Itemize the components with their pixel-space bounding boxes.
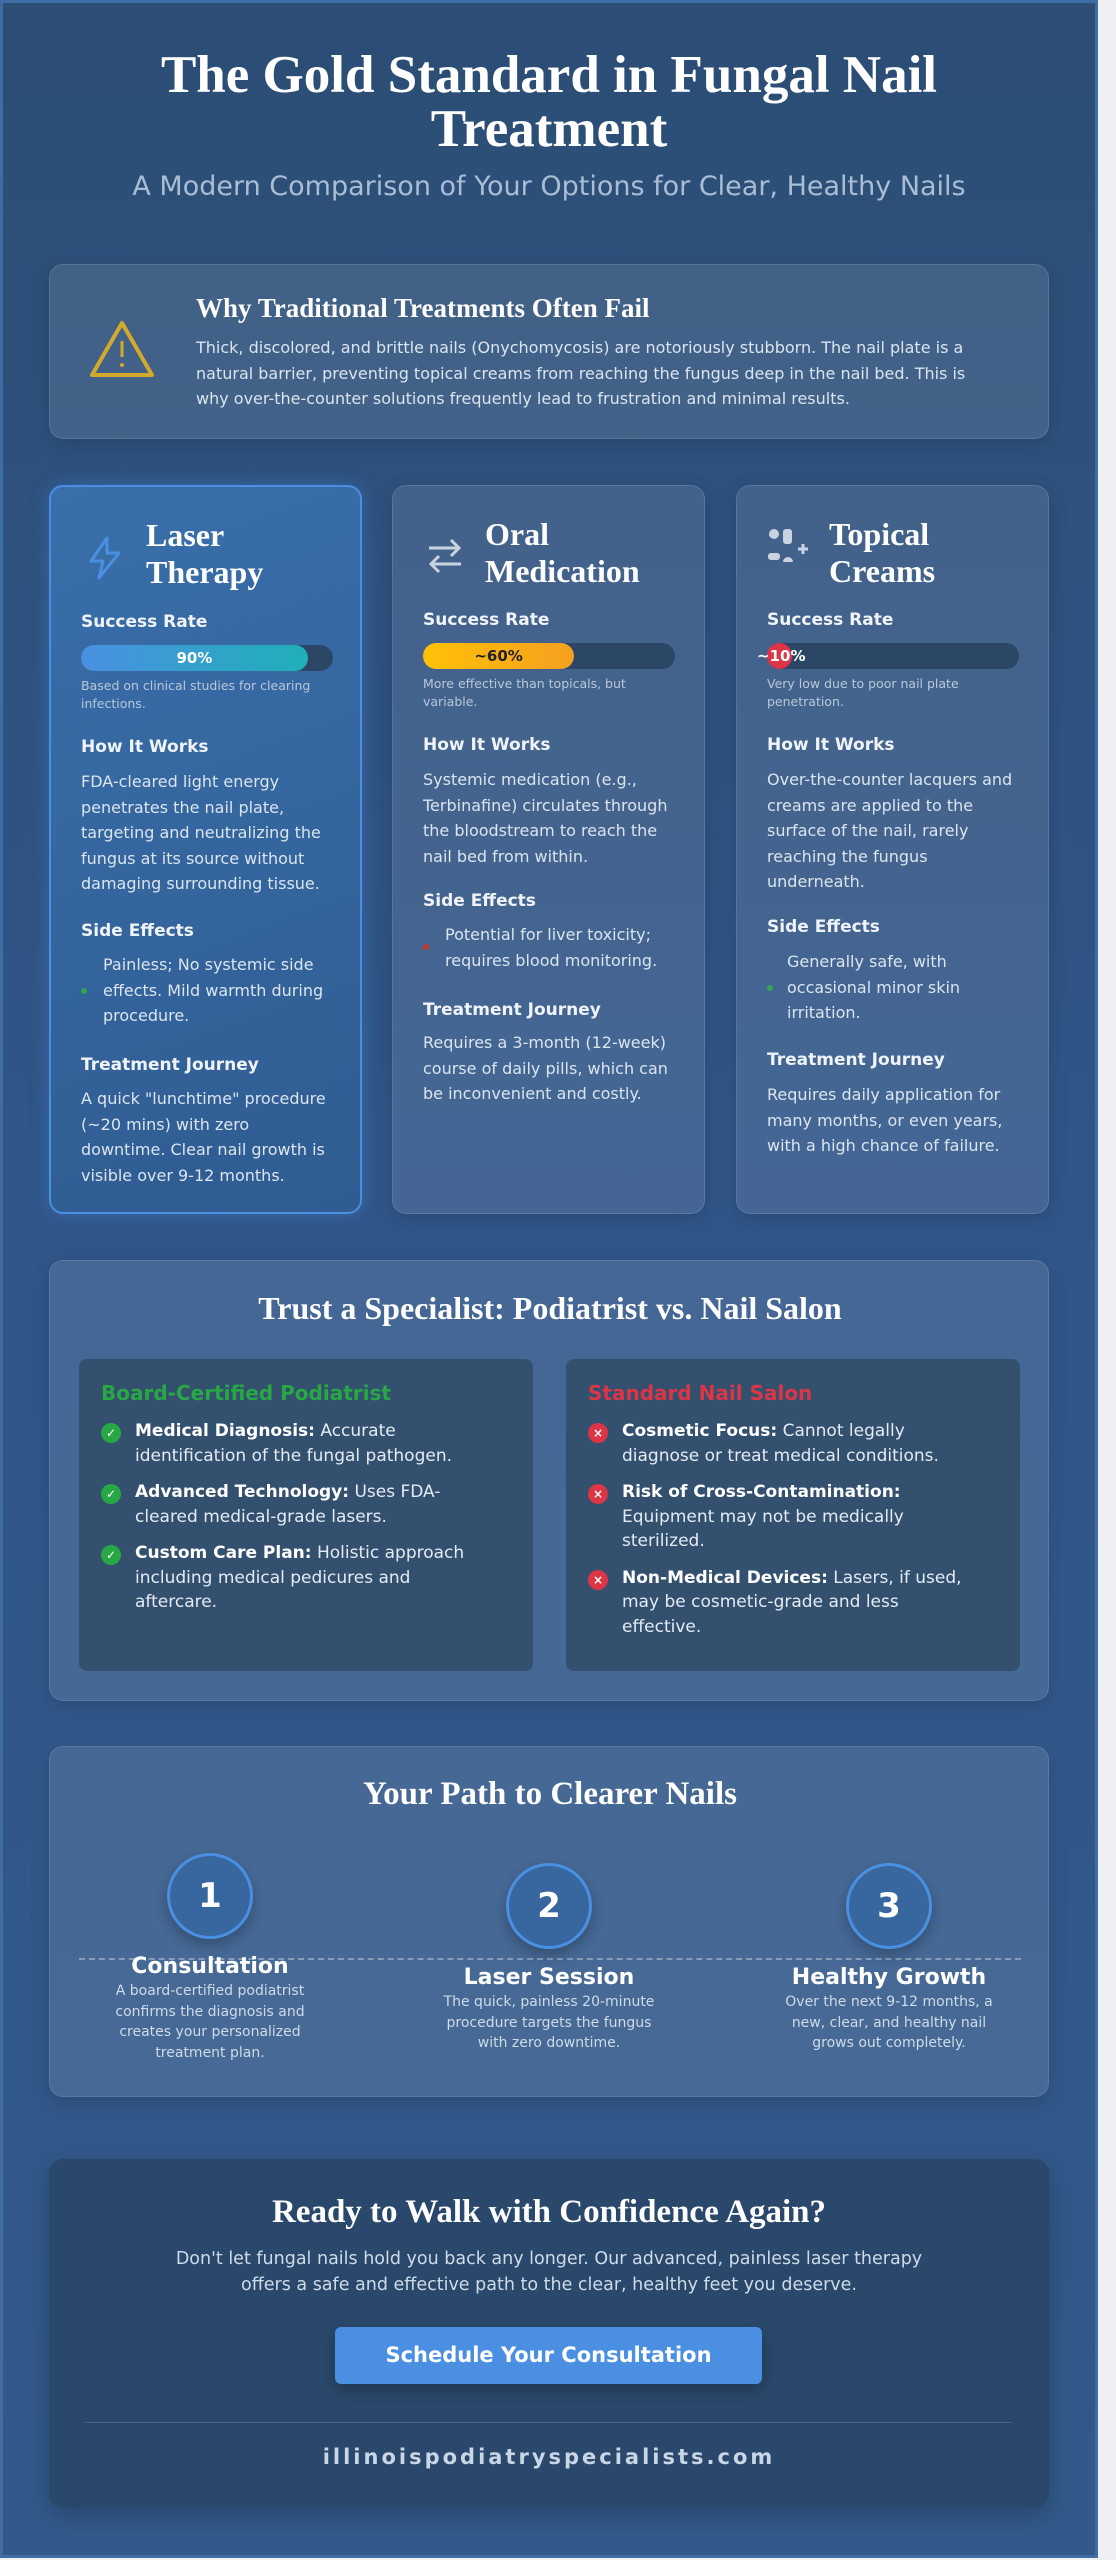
text: Don't let fungal nails hold you back any longer. Our advanced, painless laser therapy offers a safe and effective path to the clear, healthy feet you deserve. [176, 2249, 922, 2295]
step 2: 2 [537, 1886, 561, 1926]
panel: laser therapy: Based on clinical studies for clearing infections. [81, 678, 310, 711]
icon: lightning [90, 536, 120, 580]
panel: call to action [49, 2159, 1049, 2508]
column: salon: × [593, 1487, 603, 1501]
panel: laser therapy: A quick "lunchtime" procedure (~20 mins) with zero downtime. Clear nail growth is visible over 9-12 months. [81, 1089, 326, 1184]
panel: topical creams: How It Works [767, 735, 895, 755]
panel: topical creams: Very low due to poor nail plate penetration. [767, 676, 959, 709]
icon: exchange arrows [429, 539, 461, 573]
panel: oral medication: Side Effects [423, 891, 536, 911]
column: podiatrist: Custom Care Plan: Holistic approach including medical pedicures and aftercare. [135, 1543, 464, 1612]
step 1: Consultation [131, 1954, 289, 1979]
icon: warning triangle [90, 320, 154, 377]
heading: Your Path to Clearer Nails [363, 1776, 737, 1812]
icon: cream dots [768, 529, 808, 562]
panel: laser therapy: Side Effects [81, 921, 194, 941]
panel: topical creams: Treatment Journey [767, 1050, 945, 1070]
bar: ~10% [767, 643, 1019, 669]
column: salon: Cosmetic Focus: Cannot legally diagnose or treat medical conditions. [622, 1421, 939, 1466]
card title [146, 517, 264, 590]
column: podiatrist: Medical Diagnosis: Accurate identification of the fungal pathogen. [135, 1421, 452, 1466]
step 3 [785, 1863, 993, 2051]
panel: topical creams: Side Effects [767, 917, 880, 937]
bar: ~10%: ~10% [757, 647, 805, 665]
panel: laser therapy: Success Rate [81, 612, 207, 632]
card title: Medication [485, 553, 640, 589]
column: salon: Non-Medical Devices: Lasers, if used, may be cosmetic-grade and less effective. [622, 1568, 962, 1636]
column: salon: Standard Nail Salon [588, 1381, 812, 1405]
step 2 [444, 1863, 654, 2051]
panel: topical creams: Success Rate [767, 610, 893, 630]
step 3: Over the next 9-12 months, a new, clear, and healthy nail grows out completely. [785, 1994, 993, 2051]
panel: oral medication: Systemic medication (e.g., Terbinafine) circulates through the bloodstream to reach the nail bed from within. [423, 770, 667, 866]
column: salon: × [593, 1426, 603, 1440]
heading: Why Traditional Treatments Often Fail [196, 293, 650, 323]
title [161, 46, 937, 158]
card title: Creams [829, 553, 935, 589]
panel: laser therapy [49, 485, 362, 1214]
button: Schedule Your Consultation [385, 2343, 712, 2367]
panel: path to clearer nails [49, 1746, 1049, 2097]
panel: oral medication: Potential for liver toxicity; requires blood monitoring. [445, 925, 657, 970]
button [335, 2327, 762, 2384]
card title [485, 516, 640, 589]
step 2: Laser Session [464, 1965, 634, 1990]
card title: Laser [146, 517, 224, 553]
panel: oral medication: Success Rate [423, 610, 549, 630]
card title [829, 516, 935, 589]
panel: topical creams [736, 485, 1049, 1214]
bar: 90% [81, 645, 333, 671]
column: podiatrist: ✓ [106, 1487, 116, 1501]
subtitle: A Modern Comparison of Your Options for Clear, Healthy Nails [132, 171, 966, 202]
step 3: Healthy Growth [792, 1965, 986, 1990]
panel: oral medication [392, 485, 705, 1214]
panel: laser therapy: Painless; No systemic side effects. Mild warmth during procedure. [103, 955, 323, 1025]
panel: oral medication: How It Works [423, 735, 551, 755]
heading: Ready to Walk with Confidence Again? [272, 2194, 826, 2230]
title: The Gold Standard in Fungal Nail [161, 46, 937, 104]
panel: podiatrist vs salon [49, 1260, 1049, 1701]
column: podiatrist: Advanced Technology: Uses FDA-cleared medical-grade lasers. [135, 1482, 440, 1526]
bar: ~60%: ~60% [474, 647, 523, 665]
column: podiatrist: Board-Certified Podiatrist [101, 1381, 391, 1405]
step 3: 3 [877, 1886, 901, 1926]
panel: oral medication: More effective than topicals, but variable. [423, 676, 626, 709]
bar: 90%: 90% [176, 649, 212, 667]
panel: oral medication: Treatment Journey [423, 1000, 601, 1020]
column: podiatrist: ✓ [106, 1548, 116, 1562]
step 2: The quick, painless 20-minute procedure targets the fungus with zero downtime. [444, 1994, 654, 2051]
step 1: 1 [198, 1876, 222, 1916]
heading: Trust a Specialist: Podiatrist vs. Nail Salon [258, 1290, 842, 1326]
panel: laser therapy: FDA-cleared light energy penetrates the nail plate, targeting and neutralizing the fungus at its source without damaging surrounding tissue. [81, 772, 321, 893]
card title: Topical [829, 516, 929, 552]
panel: topical creams: Generally safe, with occasional minor skin irritation. [787, 952, 960, 1022]
card title: Oral [485, 516, 549, 552]
step 1: A board-certified podiatrist confirms the diagnosis and creates your personalized treatment plan. [115, 1983, 305, 2060]
step 1 [115, 1853, 305, 2060]
column: salon: Risk of Cross-Contamination: Equipment may not be medically sterilized. [622, 1482, 904, 1551]
website url: illinoispodiatryspecialists.com [323, 2445, 775, 2469]
panel: topical creams: Requires daily application for many months, or even years, with a high chance of failure. [767, 1085, 1002, 1155]
panel: topical creams: Over-the-counter lacquers and creams are applied to the surface of the nail, rarely reaching the fungus underneath. [767, 770, 1012, 891]
column: salon [566, 1359, 1020, 1671]
panel: laser therapy: How It Works [81, 737, 209, 757]
panel: laser therapy: Treatment Journey [81, 1055, 259, 1075]
panel: oral medication: Requires a 3-month (12-week) course of daily pills, which can be inconvenient and costly. [423, 1033, 668, 1103]
card title: Therapy [146, 554, 263, 590]
title: Treatment [431, 100, 667, 158]
body text: Thick, discolored, and brittle nails (Onychomycosis) are notoriously stubborn. The nail plate is a natural barrier, preventing topical creams from reaching the fungus deep in the nail bed. This is why over-the-counter solutions frequently lead to frustration and minimal results. [196, 338, 965, 408]
bar: ~60% [423, 643, 675, 669]
panel: why traditional treatments fail [49, 264, 1049, 439]
column: podiatrist: ✓ [106, 1426, 116, 1440]
column: podiatrist [79, 1359, 533, 1671]
column: salon: × [593, 1572, 603, 1586]
